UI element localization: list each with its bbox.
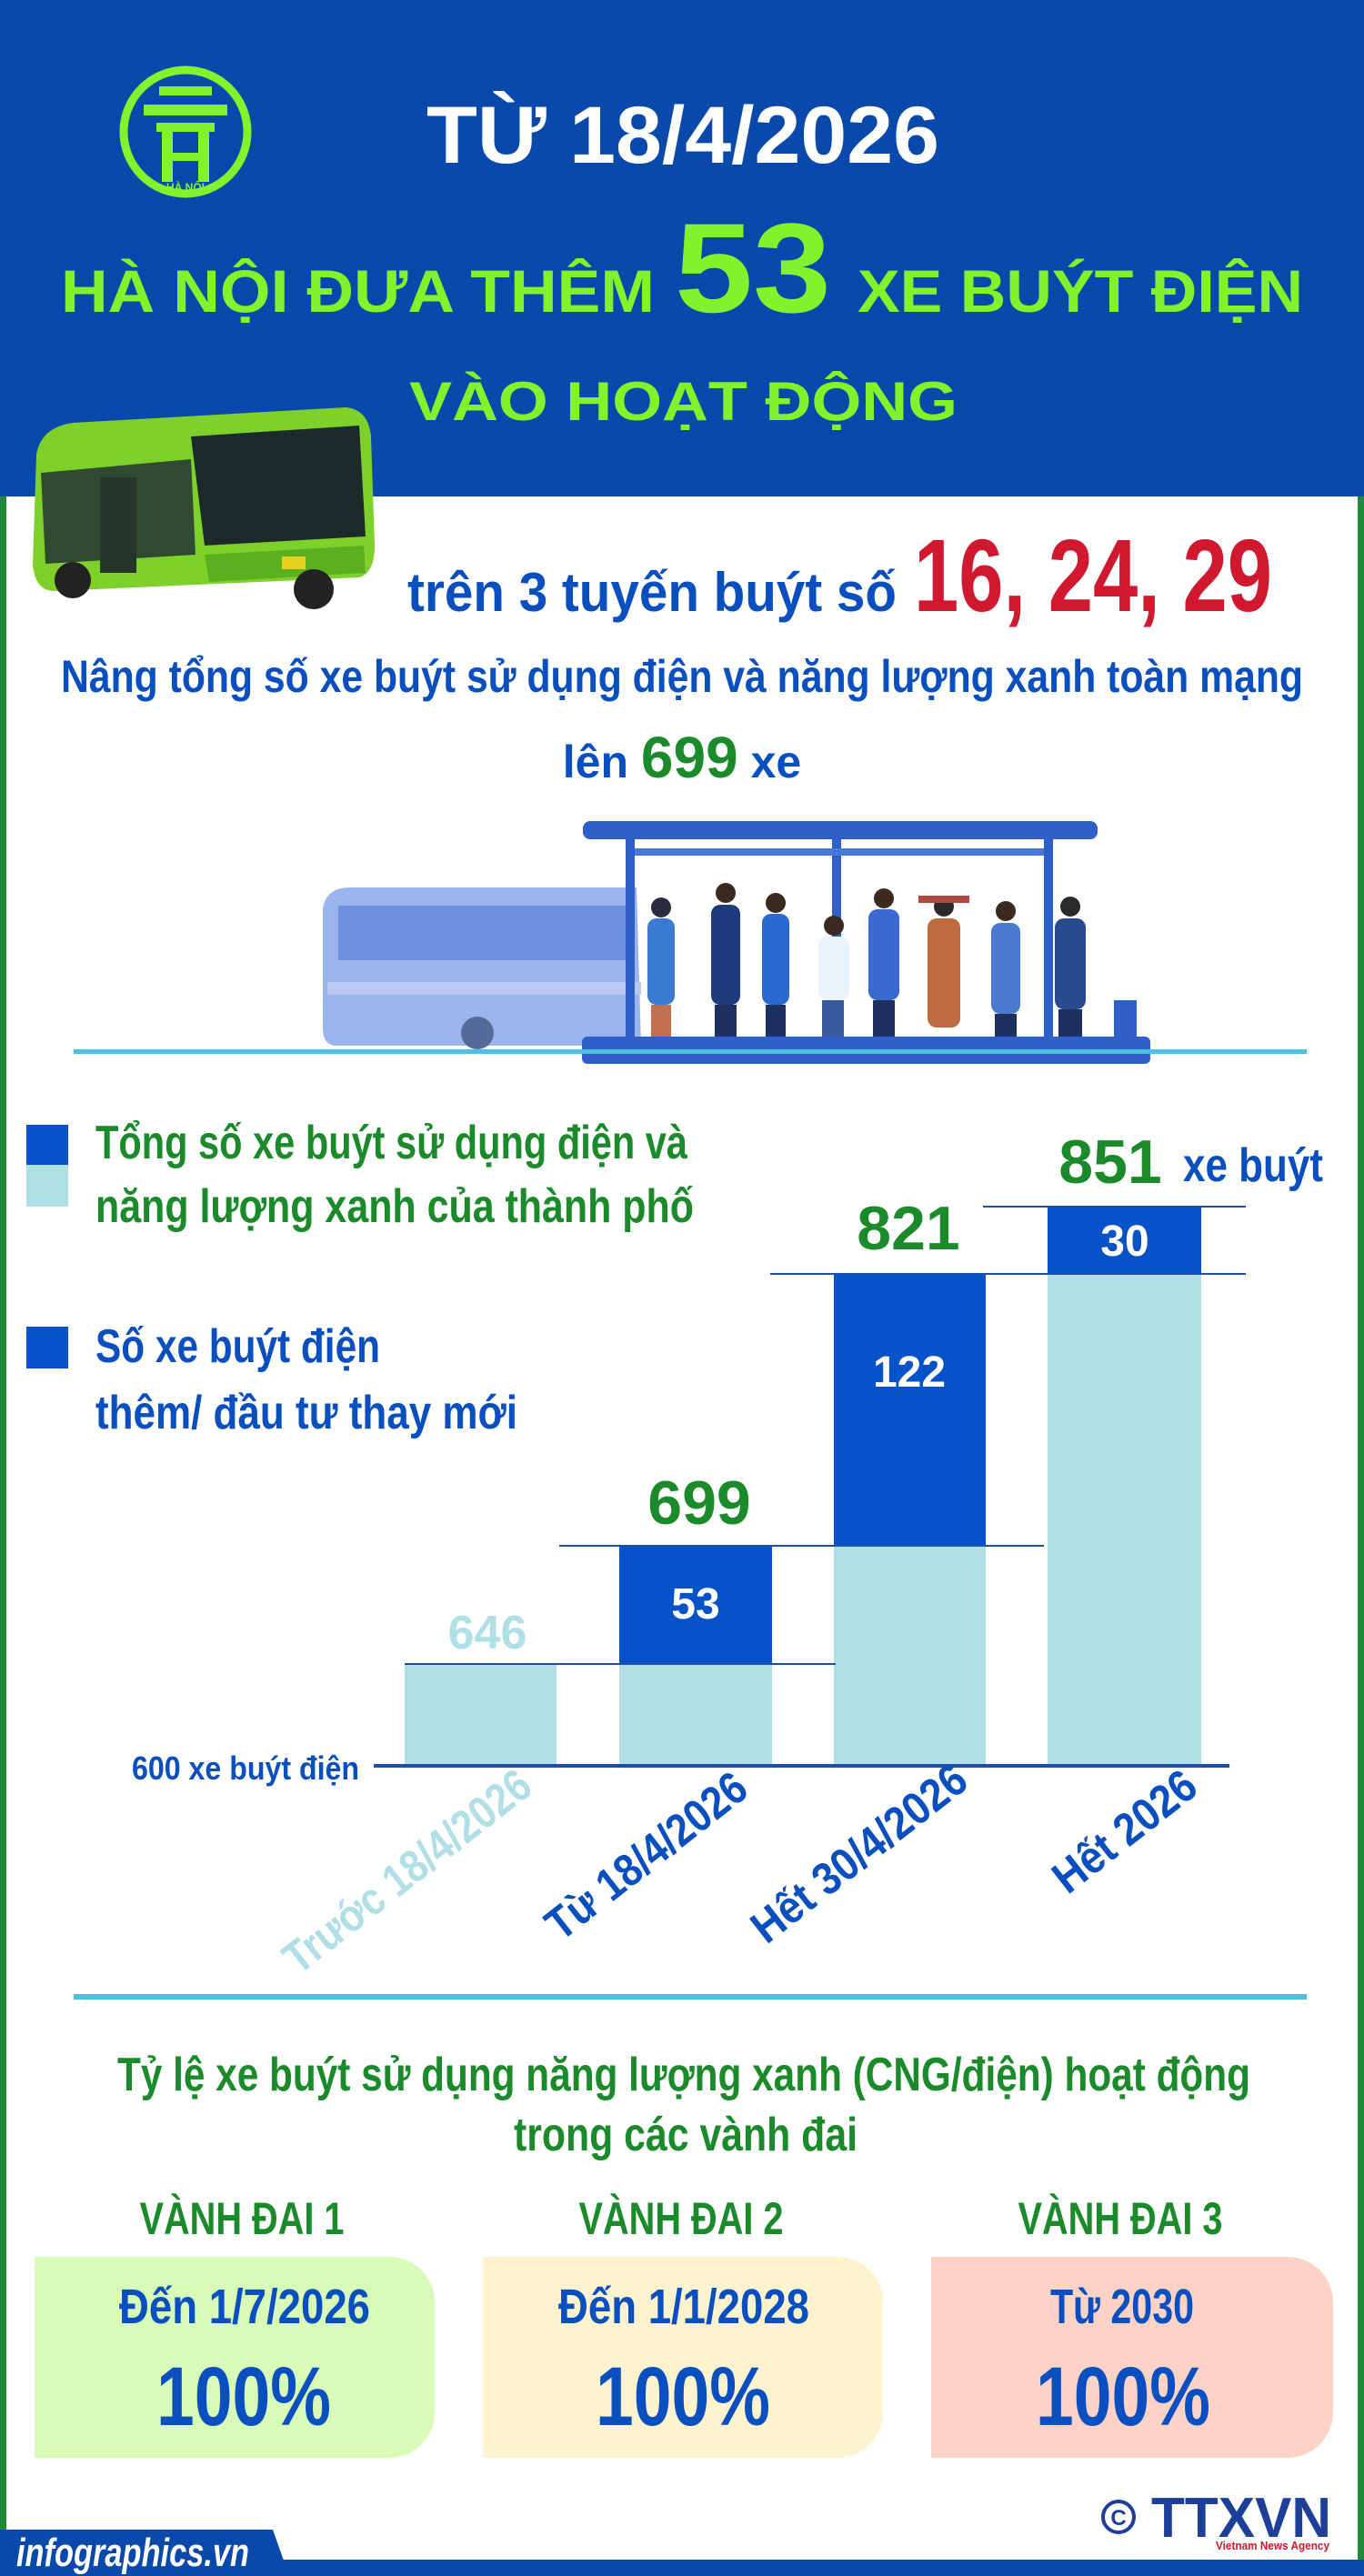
text: total network: lên 699 xe [563, 725, 801, 790]
panel: ring road 2: 100% [596, 2350, 770, 2443]
legend: added electric buses [26, 1320, 517, 1439]
bar chart: 821 [857, 1194, 960, 1263]
icon: Hanoi logo [124, 70, 247, 194]
bar chart: 600 xe buýt điện [132, 1749, 359, 1787]
title line 2: HÀ NỘI ĐƯA THÊM [61, 257, 655, 325]
icon: Hanoi logo: HÀ NỘI [166, 180, 205, 194]
illustration: green electric bus [33, 407, 375, 609]
footer [0, 2530, 1364, 2576]
subtitle: routes: trên 3 tuyến buýt số [407, 562, 897, 623]
title line 3: VÀO HOẠT ĐỘNG [409, 371, 958, 432]
panel: ring road 1 [35, 2193, 435, 2458]
panel: ring road 3: 100% [1036, 2350, 1210, 2443]
subtitle: routes: 16, 24, 29 [914, 518, 1272, 633]
legend: total green buses: Tổng số xe buýt sử dụng điện và [95, 1117, 688, 1169]
panel: ring road 1: VÀNH ĐAI 1 [140, 2193, 344, 2244]
panel: ring road 3: VÀNH ĐAI 3 [1018, 2193, 1222, 2244]
panel: ring road 2: VÀNH ĐAI 2 [578, 2193, 784, 2244]
bar chart: 53 [671, 1580, 720, 1629]
footer: infographics.vn [16, 2531, 249, 2575]
bar chart [132, 1128, 1323, 1984]
panel: ring road 1: 100% [156, 2350, 331, 2443]
bar chart: xe buýt [1183, 1139, 1323, 1192]
bar chart: 122 [873, 1348, 946, 1397]
logo: TTXVN: Vietnam News Agency [1216, 2539, 1330, 2552]
bar chart: 851 [1058, 1128, 1162, 1197]
bar chart: 699 [647, 1468, 751, 1538]
legend: total green buses: năng lượng xanh của thành phố [95, 1180, 694, 1233]
panel: ring road 3: Từ 2030 [1050, 2280, 1194, 2334]
title line 2: XE BUÝT ĐIỆN [858, 257, 1303, 325]
legend: added electric buses: Số xe buýt điện [95, 1320, 380, 1373]
bar chart: Từ 18/4/2026 [536, 1761, 757, 1950]
title line 2 [61, 196, 1303, 339]
header background [0, 0, 1364, 496]
bar chart: Hết 30/4/2026 [741, 1753, 977, 1953]
logo: TTXVN: C [1110, 2506, 1127, 2531]
legend: total green buses [26, 1117, 694, 1233]
heading: green bus ratio in ring roads [117, 2049, 1250, 2161]
panel: ring road 2 [483, 2193, 883, 2458]
illustration: bus stop with passengers [323, 821, 1150, 1064]
bar chart: 646 [448, 1607, 527, 1659]
panel: ring road 2: Đến 1/1/2028 [558, 2280, 809, 2334]
text: total network [61, 651, 1303, 790]
bar chart: Trước 18/4/2026 [273, 1759, 541, 1984]
title line 2: 53 [675, 196, 831, 339]
panel: ring road 3 [931, 2193, 1333, 2458]
panel: ring road 1: Đến 1/7/2026 [119, 2280, 370, 2334]
bar chart: Hết 2026 [1043, 1759, 1207, 1903]
logo: TTXVN: TTXVN [1151, 2487, 1331, 2550]
subtitle: routes [407, 518, 1272, 633]
legend: added electric buses: thêm/ đầu tư thay mới [95, 1387, 517, 1439]
title line 1: TỪ 18/4/2026 [426, 89, 939, 180]
bar chart: 30 [1100, 1218, 1149, 1266]
heading: green bus ratio in ring roads: trong các vành đai [514, 2109, 858, 2161]
